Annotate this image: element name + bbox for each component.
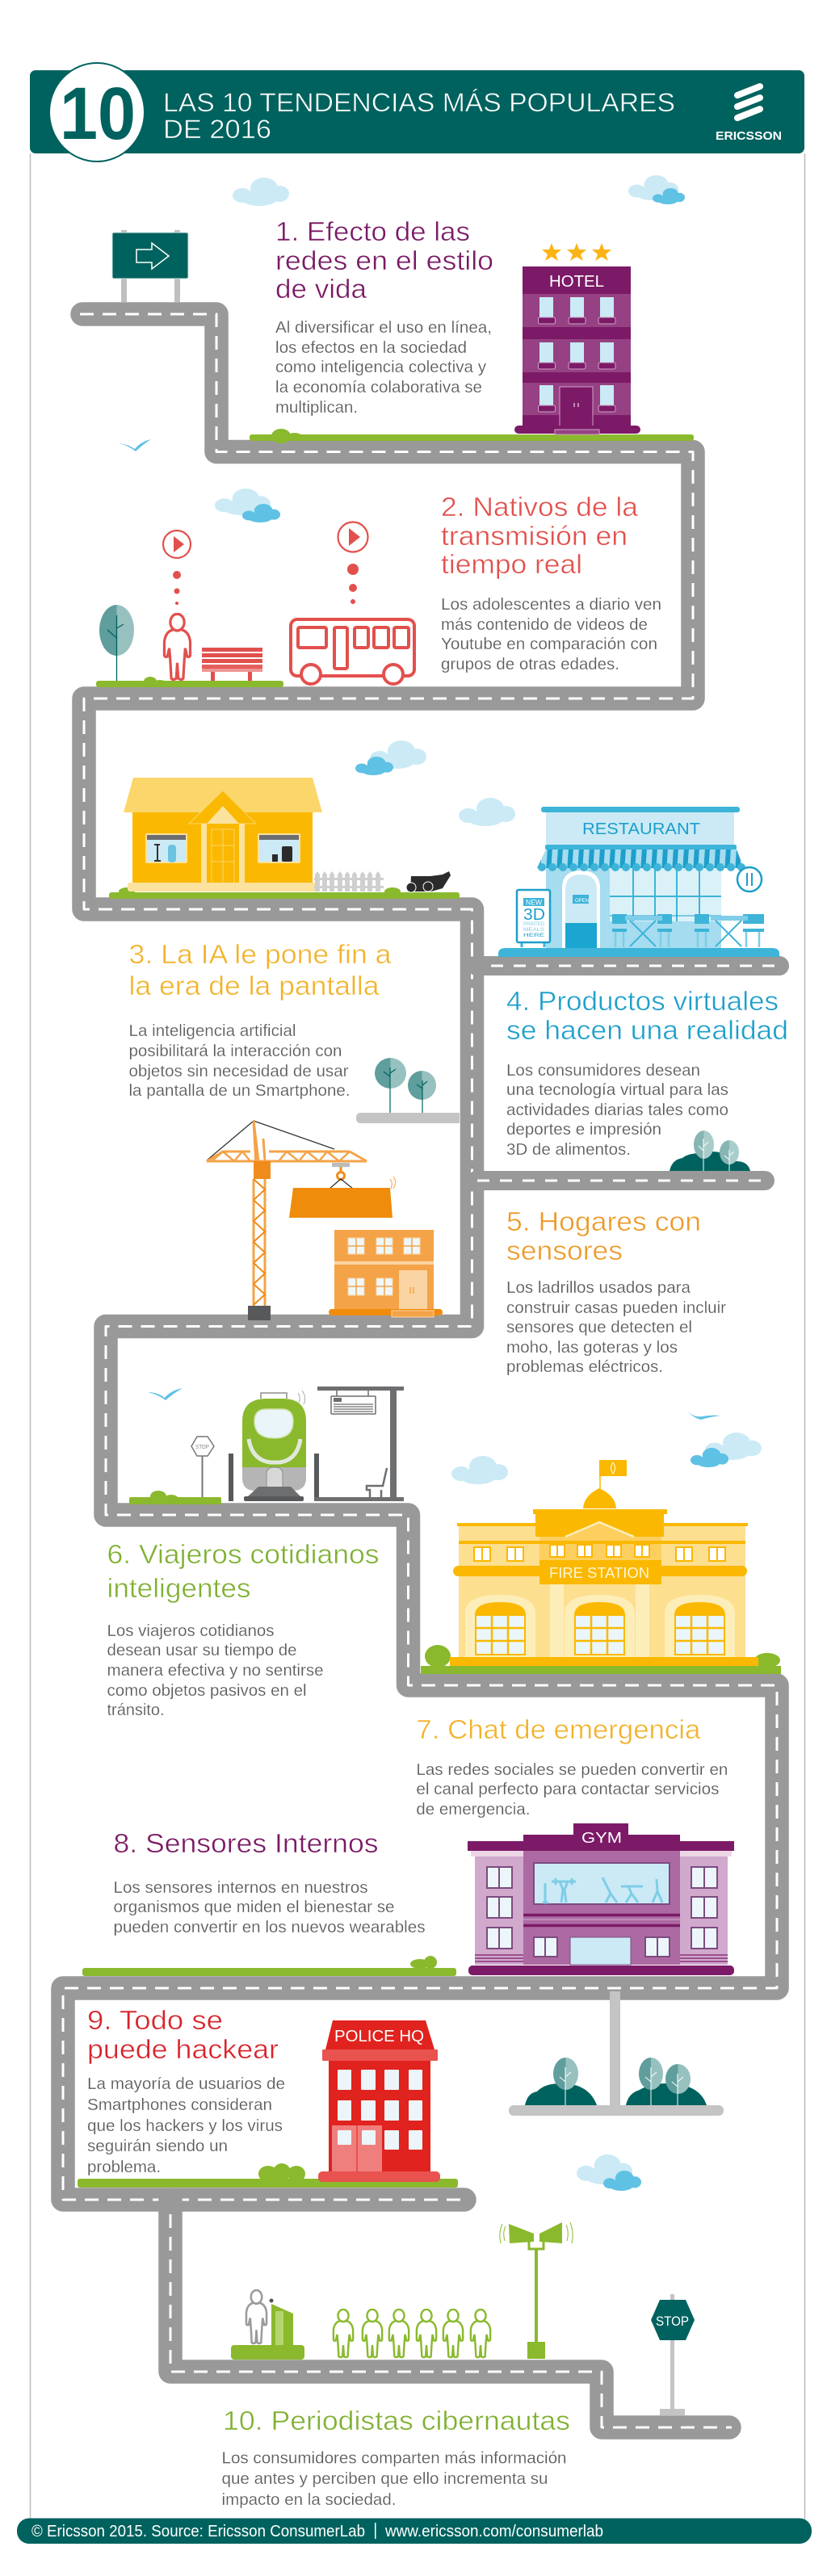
bush with trees bbox=[670, 1131, 750, 1171]
title: LAS 10 TENDENCIAS MÁS POPULARES bbox=[163, 88, 675, 117]
text 8 bbox=[113, 1879, 425, 1936]
cloud bbox=[451, 1456, 508, 1484]
text 3 bbox=[129, 1022, 351, 1100]
badge: number 10: 10 bbox=[60, 73, 136, 155]
crane bbox=[207, 1121, 396, 1306]
grass strip 9 bbox=[78, 2163, 458, 2188]
stars bbox=[542, 243, 611, 261]
text 4 bbox=[506, 1062, 728, 1159]
tables and chairs bbox=[612, 914, 764, 947]
heading 2 bbox=[441, 492, 639, 579]
shelf with trees bbox=[356, 1058, 460, 1123]
loudspeakers on pole bbox=[500, 2222, 573, 2359]
heading 3: 3. La IA le pone fin a bbox=[129, 939, 392, 969]
text 5: Los ladrillos usados para bbox=[506, 1279, 691, 1297]
heading 5: 5. Hogares con bbox=[506, 1206, 701, 1236]
door: OPEN bbox=[575, 899, 589, 904]
text 1: la economía colaborativa se bbox=[275, 379, 482, 396]
gym bbox=[468, 1823, 734, 1975]
heading 3 bbox=[129, 939, 392, 1001]
bench bbox=[202, 648, 262, 681]
round sign bbox=[737, 867, 762, 892]
grass strip 8 bbox=[82, 1956, 456, 1976]
fence bbox=[314, 871, 384, 892]
text 5: sensores que detecten el bbox=[506, 1319, 692, 1336]
heading 9: 9. Todo se bbox=[87, 2005, 223, 2035]
text 5: moho, las goteras y los bbox=[506, 1339, 678, 1357]
text 1 bbox=[275, 319, 492, 417]
text 9 bbox=[87, 2075, 285, 2176]
grass strip 2 bbox=[96, 677, 283, 687]
bird bbox=[148, 1388, 183, 1400]
bird bbox=[686, 1409, 720, 1420]
speaker on podium bbox=[231, 2290, 304, 2360]
text 8: pueden convertir en los nuevos wearables bbox=[113, 1919, 425, 1936]
text 2: grupos de otras edades. bbox=[441, 656, 619, 673]
text 3: la pantalla de un Smartphone. bbox=[129, 1082, 351, 1100]
text 6: Los viajeros cotidianos bbox=[107, 1622, 275, 1640]
police headquarters: POLICE HQ bbox=[334, 2028, 424, 2045]
board: 3D printed meals: NEW bbox=[526, 898, 542, 906]
text 7: el canal perfecto para contactar servicios bbox=[416, 1781, 719, 1798]
board: 3D printed meals: MEALS bbox=[523, 927, 545, 933]
cloud bbox=[459, 798, 515, 826]
text 4: deportes e impresión bbox=[506, 1121, 661, 1139]
text 10 bbox=[221, 2450, 567, 2509]
heading 3: la era de la pantalla bbox=[129, 971, 380, 1001]
heading 8: 8. Sensores Internos bbox=[113, 1828, 378, 1858]
orange building bbox=[329, 1230, 443, 1317]
road branch restaurant bbox=[476, 956, 779, 975]
tree bbox=[99, 605, 134, 681]
main road bbox=[63, 314, 777, 2200]
text 2: Youtube en comparación con bbox=[441, 636, 657, 653]
departure board bbox=[331, 1396, 376, 1414]
text 10: Los consumidores comparten más información bbox=[221, 2450, 567, 2468]
heading 1 bbox=[275, 216, 493, 304]
lower right shelf with trees bbox=[509, 1991, 724, 2116]
restaurant bbox=[498, 807, 779, 957]
person with video bubble bbox=[163, 531, 191, 679]
footer: www.ericsson.com/consumerlab bbox=[384, 2523, 603, 2540]
text 10: impacto en la sociedad. bbox=[221, 2491, 396, 2509]
text 4: 3D de alimentos. bbox=[506, 1141, 631, 1159]
text 9: La mayoría de usuarios de bbox=[87, 2075, 285, 2093]
cloud pair bbox=[628, 175, 685, 204]
arched windows bbox=[465, 1595, 735, 1659]
heading 5 bbox=[506, 1206, 701, 1265]
text 9: problema. bbox=[87, 2159, 161, 2176]
Ericsson logo: ERICSSON bbox=[716, 130, 782, 143]
small windows bbox=[474, 1545, 725, 1561]
cloud pair bbox=[691, 1433, 762, 1467]
heading 2: tiempo real bbox=[441, 549, 582, 579]
fire station: FIRE STATION bbox=[549, 1565, 649, 1581]
road branch towards section 10 bbox=[170, 2200, 732, 2427]
fire station bbox=[450, 1460, 758, 1666]
heading 1: redes en el estilo bbox=[275, 245, 493, 275]
stop sign: STOP bbox=[656, 2314, 689, 2329]
heading 4: 4. Productos virtuales bbox=[506, 986, 779, 1016]
gym: GYM bbox=[581, 1830, 622, 1846]
text 9: seguirán siendo un bbox=[87, 2138, 228, 2155]
heading 9: puede hackear bbox=[87, 2034, 279, 2064]
cloud bbox=[233, 178, 289, 206]
heading 1: de vida bbox=[275, 274, 367, 304]
text 2: Los adolescentes a diario ven bbox=[441, 596, 661, 614]
text 6 bbox=[107, 1622, 323, 1719]
awning bbox=[537, 850, 744, 868]
stop sign small bbox=[191, 1437, 214, 1497]
cloud pair bbox=[215, 489, 280, 522]
text 7: de emergencia. bbox=[416, 1801, 530, 1819]
police headquarters bbox=[318, 2020, 440, 2182]
gym side windows bbox=[487, 1867, 717, 1957]
Ericsson logo bbox=[716, 86, 782, 143]
audience bbox=[334, 2310, 490, 2357]
lawn mower bbox=[406, 871, 451, 892]
text 2 bbox=[441, 596, 661, 673]
grass with bushes bbox=[421, 1645, 781, 1674]
road branch section 5 bbox=[476, 1171, 765, 1190]
heading 10: 10. Periodistas cibernautas bbox=[223, 2406, 570, 2435]
text 5 bbox=[506, 1279, 726, 1376]
heading 2: 2. Nativos de la bbox=[441, 492, 639, 522]
text 1: multiplican. bbox=[275, 399, 358, 417]
cloud pair bbox=[577, 2154, 641, 2191]
footer bbox=[17, 2518, 812, 2544]
grass strip and bush bbox=[129, 1491, 221, 1504]
text 9: Smartphones consideran bbox=[87, 2096, 272, 2114]
text 4: Los consumidores desean bbox=[506, 1062, 700, 1080]
grass strip 1 bbox=[250, 429, 694, 443]
heading 5: sensores bbox=[506, 1236, 623, 1265]
stop sign small: STOP bbox=[195, 1445, 209, 1450]
station shelter bbox=[314, 1387, 404, 1501]
grass strip 3 bbox=[109, 887, 460, 899]
text 1: los efectos en la sociedad bbox=[275, 339, 467, 357]
restaurant: RESTAURANT bbox=[582, 820, 700, 838]
text 1: Al diversificar el uso en línea, bbox=[275, 319, 492, 337]
heading 6 bbox=[107, 1539, 380, 1603]
board: 3D printed meals: 3D bbox=[523, 906, 545, 924]
heading 9 bbox=[87, 2005, 279, 2064]
heading 7: 7. Chat de emergencia bbox=[416, 1714, 701, 1744]
text 5: construir casas pueden incluir bbox=[506, 1299, 726, 1317]
board: 3D printed meals: HERE bbox=[523, 933, 545, 938]
text 3: La inteligencia artificial bbox=[129, 1022, 296, 1040]
text 2: más contenido de videos de bbox=[441, 616, 648, 634]
hotel: HOTEL bbox=[549, 273, 604, 291]
footer: © Ericsson 2015. Source: Ericsson ConsumerLab bbox=[31, 2523, 365, 2540]
main window with athletes bbox=[534, 1863, 670, 1904]
text 10: que antes y perciben que ello incrementa su bbox=[221, 2470, 548, 2488]
crane base bbox=[248, 1306, 271, 1320]
text 3: posibilitará la interacción con bbox=[129, 1043, 342, 1060]
text 1: como inteligencia colectiva y bbox=[275, 359, 486, 376]
text 3: objetos sin necesidad de usar bbox=[129, 1063, 349, 1080]
text 4: actividades diarias tales como bbox=[506, 1101, 728, 1119]
text 7 bbox=[416, 1761, 728, 1819]
house bbox=[124, 778, 322, 892]
door bbox=[562, 871, 600, 948]
windows bbox=[610, 868, 721, 921]
bird bbox=[118, 439, 151, 451]
train bbox=[229, 1391, 319, 1501]
text 7: Las redes sociales se pueden convertir en bbox=[416, 1761, 728, 1779]
text 8: Los sensores internos en nuestros bbox=[113, 1879, 368, 1897]
window with lamp bbox=[146, 834, 187, 862]
text 6: manera efectiva y no sentirse bbox=[107, 1662, 323, 1680]
heading 6: inteligentes bbox=[107, 1573, 250, 1603]
title: DE 2016 bbox=[163, 115, 271, 144]
text 6: como objetos pasivos en el bbox=[107, 1682, 307, 1700]
heading 4 bbox=[506, 986, 788, 1045]
text 8: organismos que miden el bienestar se bbox=[113, 1898, 394, 1916]
header banner bbox=[30, 63, 804, 162]
cloud pair bbox=[355, 740, 426, 775]
board: 3D printed meals bbox=[517, 890, 550, 947]
heading 4: se hacen una realidad bbox=[506, 1015, 788, 1045]
text 4: una tecnología virtual para las bbox=[506, 1081, 728, 1099]
text 6: desean usar su tiempo de bbox=[107, 1642, 297, 1659]
chair bbox=[367, 1468, 387, 1498]
board: 3D printed meals: PRINTED bbox=[523, 922, 545, 927]
hotel bbox=[514, 243, 640, 434]
flag bbox=[599, 1460, 627, 1491]
heading 1: 1. Efecto de las bbox=[275, 216, 470, 246]
window with kettle bbox=[258, 834, 300, 862]
heading 6: 6. Viajeros cotidianos bbox=[107, 1539, 380, 1569]
title bbox=[163, 88, 675, 144]
heading 2: transmisión en bbox=[441, 521, 628, 551]
sign with arrow bbox=[112, 230, 188, 302]
text 9: que los hackers y los virus bbox=[87, 2117, 283, 2135]
bus with video bubble bbox=[291, 522, 414, 684]
text 5: problemas eléctricos. bbox=[506, 1358, 663, 1376]
suspended brick block bbox=[289, 1188, 393, 1218]
text 6: tránsito. bbox=[107, 1701, 165, 1719]
door bbox=[332, 2125, 382, 2171]
stop sign bbox=[651, 2294, 695, 2415]
